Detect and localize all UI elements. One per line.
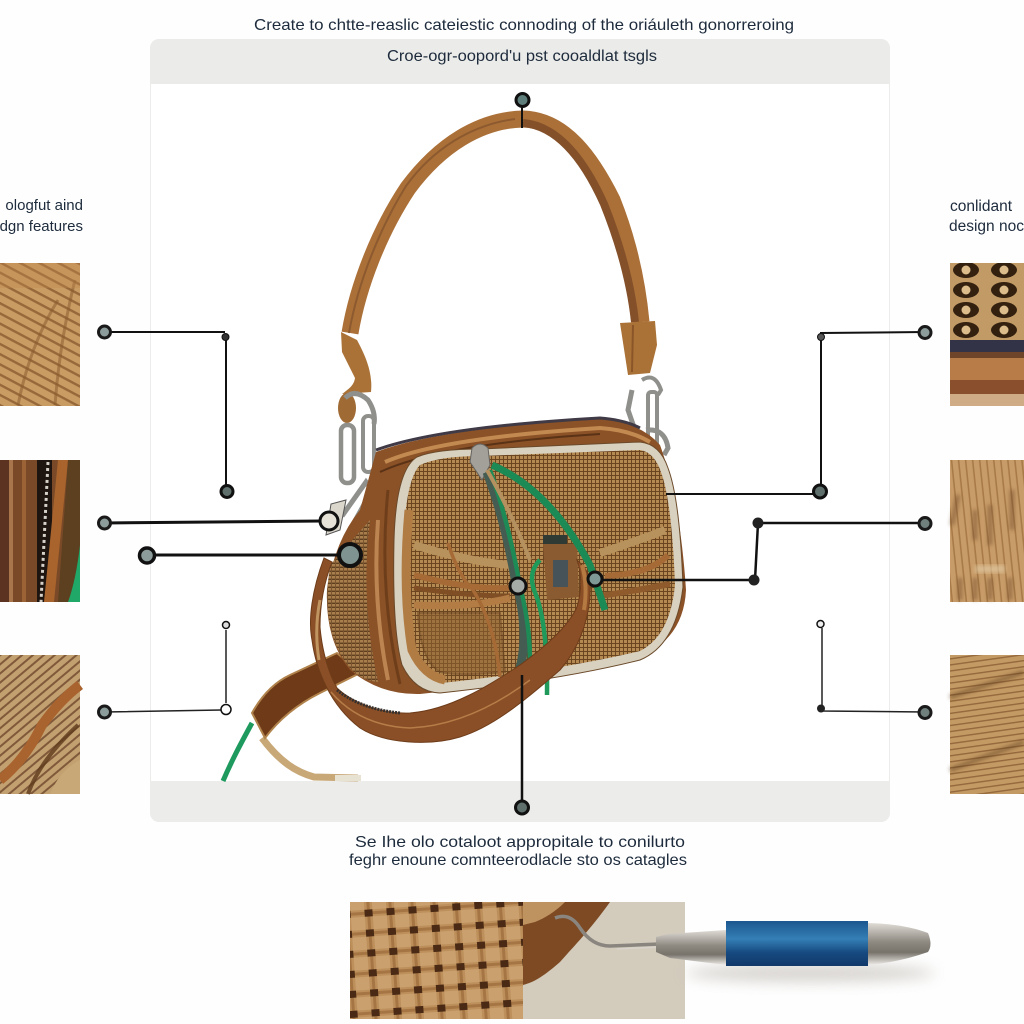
center tag	[543, 535, 579, 600]
top handle strap	[349, 119, 641, 333]
thumbnail: left middle, zipper seam	[0, 460, 80, 602]
rear belt strap	[223, 653, 361, 781]
callout lines and markers	[98, 94, 931, 814]
thumbnail: left bottom, diagonal strap	[0, 655, 80, 794]
left column heading: dgn features	[0, 218, 83, 235]
green cords	[487, 465, 605, 695]
callout: left middle two	[140, 544, 361, 566]
left column heading	[0, 197, 83, 235]
front panel left piping	[406, 510, 445, 680]
callout: center marker	[510, 578, 526, 594]
handbag illustration	[223, 119, 686, 781]
bottom caption: feghr enoune comnteerodlacle sto os catagles	[349, 852, 687, 869]
callout: top	[516, 94, 529, 128]
thumbnail: right middle, fibre	[950, 460, 1024, 602]
bag body	[327, 419, 686, 694]
thumbnail: left top, wood grain	[0, 263, 80, 406]
right column heading: conlidant	[950, 198, 1013, 215]
callout: left lower	[98, 622, 231, 718]
tool with blue handle	[555, 916, 935, 982]
bottom swatch: leather and cream fabric	[523, 902, 685, 1019]
bottom swatch: burlap weave	[350, 902, 523, 1019]
callout: left middle one	[98, 512, 338, 530]
callout: right middle	[588, 518, 931, 586]
zipper pull	[470, 444, 490, 480]
woven front panel	[403, 450, 675, 683]
zipper	[376, 418, 640, 450]
lower pocket	[418, 613, 505, 674]
panel: main frame	[150, 39, 890, 822]
callout: left upper	[98, 326, 233, 498]
thumbnail: right bottom, canvas	[950, 655, 1024, 794]
panel header text: Croe-ogr-oopord'u pst cooaldlat tsgls	[387, 48, 657, 65]
bag side panel weave	[327, 520, 378, 682]
panel footer band	[150, 781, 890, 822]
panel header band	[150, 39, 890, 84]
bottom caption	[349, 834, 687, 869]
metal chain links	[341, 378, 668, 530]
right column heading: design noc	[949, 218, 1024, 235]
callout: right upper	[666, 326, 931, 498]
stitched leather folds	[414, 530, 670, 677]
thumbnail: right top, woven knots and zipper	[950, 263, 1024, 406]
right column heading	[949, 198, 1024, 235]
front cross strap	[310, 558, 590, 742]
top leather bands	[376, 428, 650, 684]
side hardware clasp	[326, 500, 346, 535]
callout: right lower	[817, 620, 931, 718]
title: Create to chtte-reaslic cateiestic connoding of the oriáuleth gonorreroing	[254, 17, 794, 34]
bottom caption: Se Ihe olo cotaloot appropitale to conilurto	[355, 834, 685, 851]
callout: bottom	[516, 675, 528, 814]
left column heading: ologfut aind	[5, 197, 83, 214]
handle end tabs	[338, 321, 657, 423]
cream piping frame	[394, 442, 683, 693]
